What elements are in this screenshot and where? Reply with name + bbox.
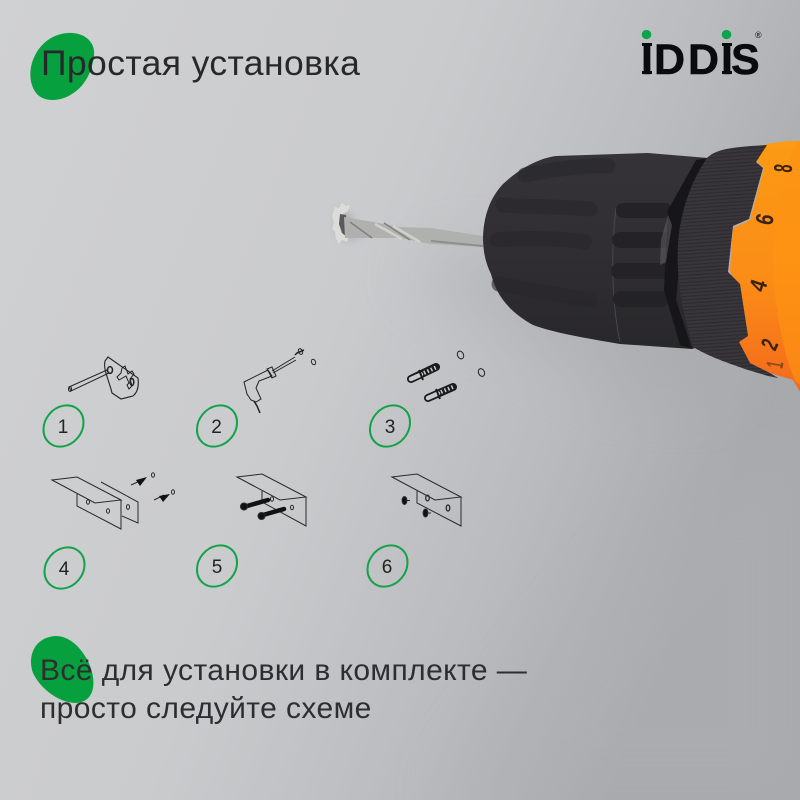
- drill bit: [344, 217, 483, 247]
- chuck: [483, 153, 720, 349]
- brand logo: ®: [755, 30, 762, 40]
- icon: mounting plate with drill: [68, 357, 138, 399]
- step number 2: 2: [211, 417, 222, 438]
- step 2: [189, 348, 316, 455]
- dial numbers: 2: [757, 336, 784, 354]
- icon: bracket with marks and arrows: [52, 473, 174, 529]
- heading: Простая установка: [41, 43, 360, 83]
- step number 6: 6: [382, 557, 392, 578]
- footer text: Всё для установки в комплекте —: [40, 654, 527, 687]
- drill hole in wall: [332, 203, 360, 244]
- icon: bracket with screws: [237, 474, 306, 526]
- black collar: [678, 145, 778, 378]
- icon: mounted bracket: [392, 474, 461, 526]
- dial numbers: 6: [750, 211, 780, 227]
- heading blob: [30, 33, 94, 100]
- brand logo: IDDIS: [641, 36, 760, 84]
- step 1: [35, 357, 138, 455]
- footer text: [40, 654, 527, 725]
- footer text: просто следуйте схеме: [40, 692, 372, 725]
- dial numbers: [743, 163, 799, 370]
- footer blob: [31, 636, 93, 703]
- dial numbers: 4: [743, 276, 773, 295]
- step number 3: 3: [385, 417, 395, 438]
- step 6: [359, 474, 461, 595]
- orange speed dial: [730, 141, 800, 392]
- step number 5: 5: [212, 557, 222, 578]
- dial numbers: 8: [769, 163, 799, 174]
- icon: wall plugs: [411, 350, 486, 399]
- step number 1: 1: [58, 417, 68, 438]
- step 3: [362, 350, 486, 455]
- drill photo: [332, 141, 800, 392]
- icon: hammer drill: [244, 348, 316, 413]
- step number 4: 4: [59, 559, 70, 580]
- step 4: [36, 473, 174, 597]
- step 5: [189, 474, 306, 595]
- dial numbers: 1: [762, 359, 790, 370]
